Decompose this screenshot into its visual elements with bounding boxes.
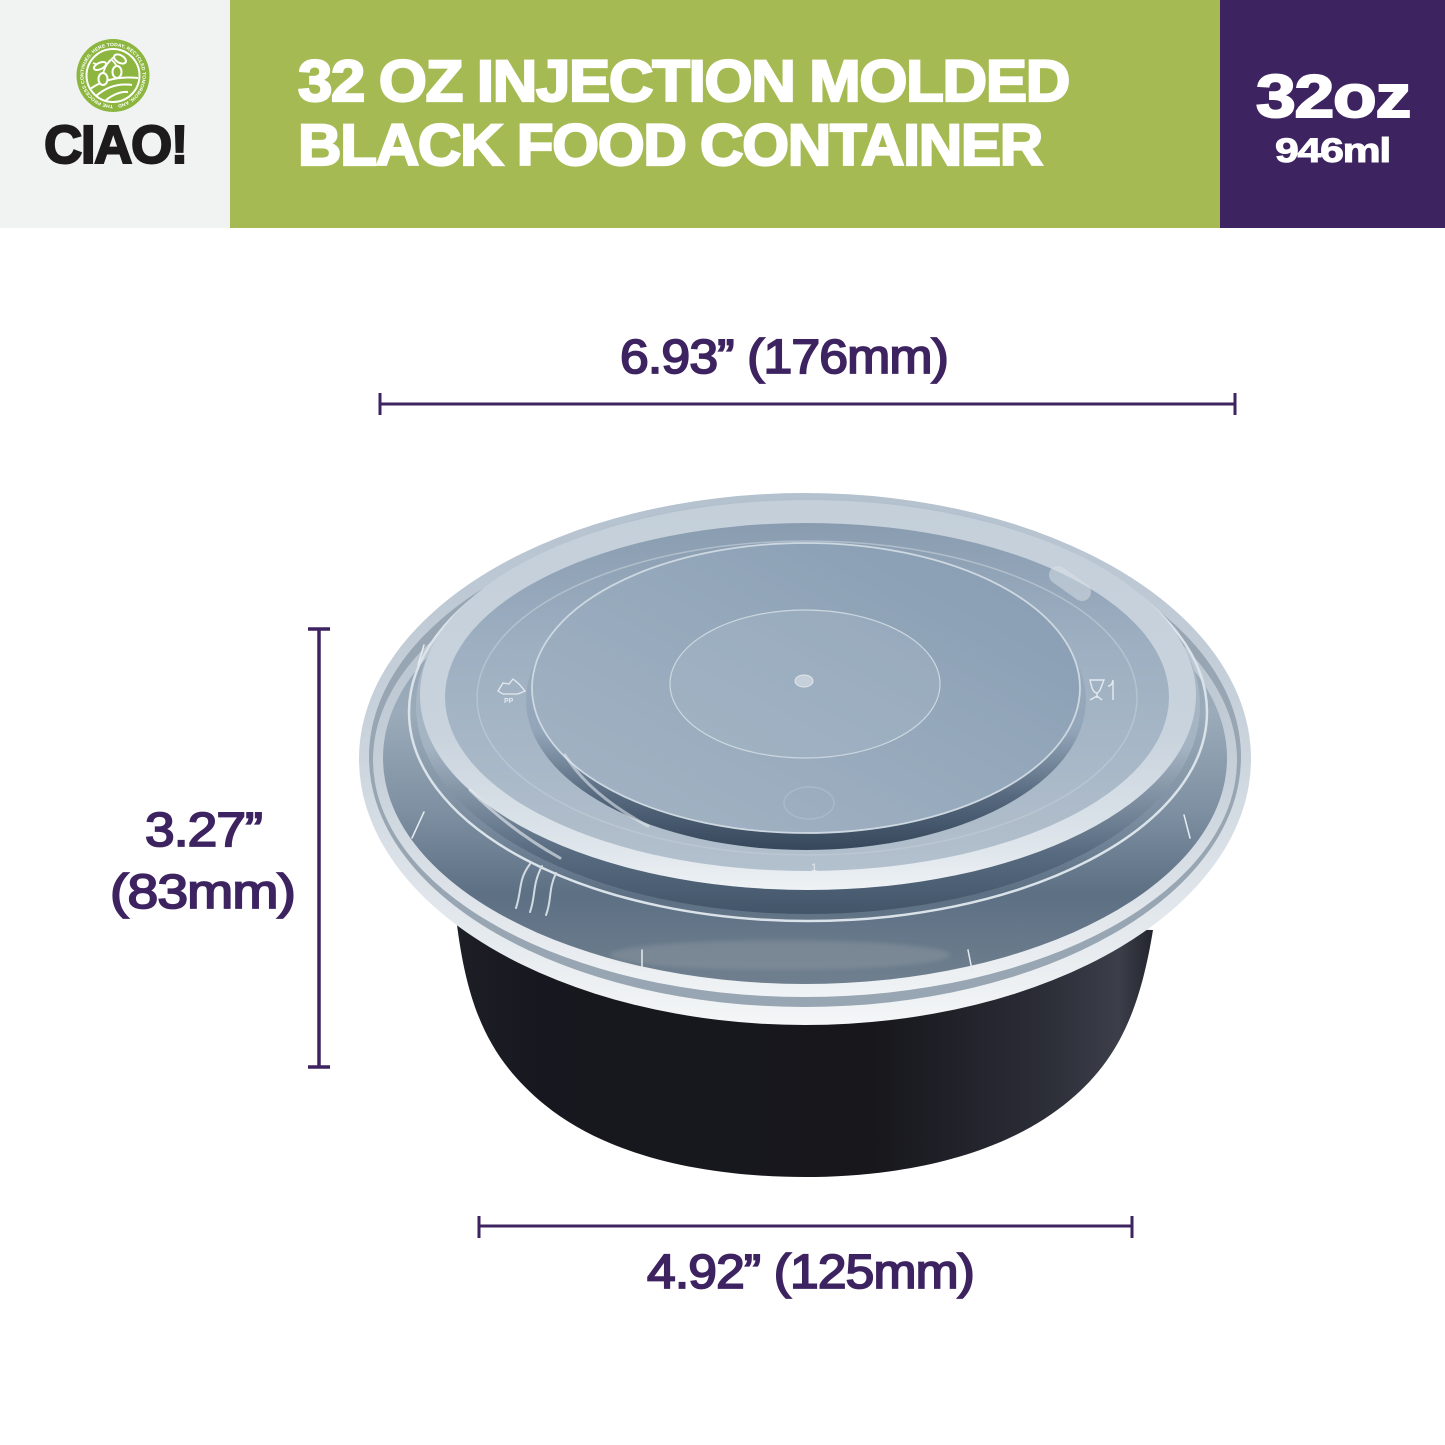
lid white ring	[420, 500, 1196, 890]
injection point	[795, 675, 813, 687]
lid flat top	[532, 543, 1080, 833]
capacity badge text	[1256, 63, 1410, 170]
icon: food safe mark	[1090, 680, 1113, 700]
lid ledge	[445, 523, 1169, 871]
lid mould number: 1	[811, 862, 817, 874]
title line 1: 32 OZ INJECTION MOLDED	[298, 49, 1069, 114]
arrow: height bar	[308, 629, 330, 1067]
icon: recycling mark	[498, 679, 525, 705]
lid bright seam	[409, 503, 1207, 921]
arrow: rim diameter bar	[380, 393, 1235, 415]
icon: recycling mark: PP	[504, 698, 514, 705]
product photo: round container with clear lid	[359, 493, 1251, 1177]
trough reflection	[610, 940, 950, 970]
logo wordmark: CIAO!	[44, 115, 187, 175]
panel: logo background	[0, 0, 230, 228]
lid ledge pale line	[477, 541, 1137, 855]
logo: CIAO!	[44, 39, 187, 175]
lid outer rim	[359, 493, 1251, 1025]
panel: capacity background	[1220, 0, 1445, 228]
embossed small mark	[784, 787, 834, 819]
lid highlights	[412, 575, 1190, 970]
embossed centre circle	[670, 610, 940, 758]
lid trough	[383, 532, 1227, 984]
arrow: base diameter bar	[479, 1216, 1132, 1238]
title	[298, 49, 1069, 178]
lid groove	[526, 550, 1086, 850]
dimension: height	[110, 629, 330, 1067]
title line 2: BLACK FOOD CONTAINER	[298, 113, 1042, 178]
icon: recycled badge: THE PROCESS CONTINUES. HERE TODAY, RECYCLED TOMORROW, AND	[80, 42, 146, 108]
dimension: top width	[380, 331, 1235, 415]
capacity in millilitres: 946ml	[1275, 132, 1390, 170]
lid dark band	[416, 498, 1200, 914]
capacity in ounces: 32oz	[1256, 63, 1410, 130]
label: height millimetres: (83mm)	[110, 866, 295, 919]
label: rim diameter: 6.93” (176mm)	[620, 331, 948, 384]
black bowl	[457, 925, 1153, 1177]
label: height inches: 3.27”	[145, 804, 262, 857]
dimension: base width	[479, 1216, 1132, 1299]
label: base diameter: 4.92” (125mm)	[647, 1246, 974, 1299]
panel: title background	[230, 0, 1220, 228]
header band	[0, 0, 1445, 228]
